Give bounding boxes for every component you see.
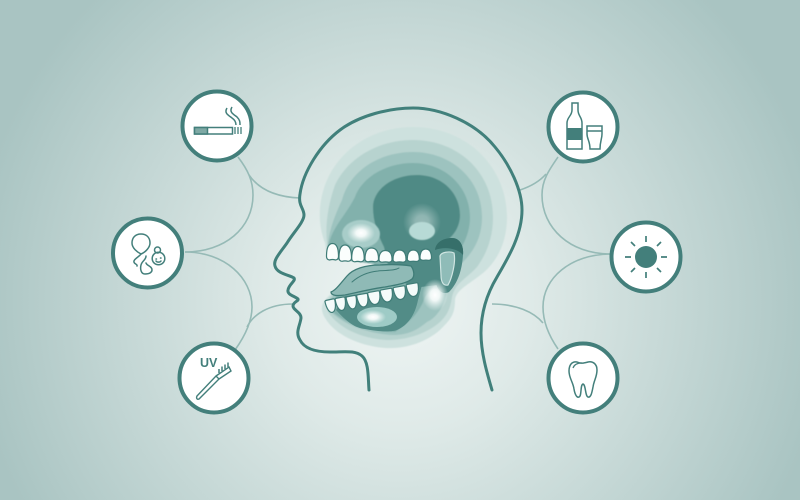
glow: sinus halo (403, 203, 441, 241)
icon: sun (612, 222, 680, 292)
lower jaw interior (336, 285, 422, 331)
icon: balloon and baby (113, 218, 182, 288)
head cross-section (275, 108, 522, 390)
upper teeth (326, 244, 432, 262)
icon: tooth (548, 344, 618, 412)
icon: cigarette (182, 92, 252, 160)
glow: cheek (347, 223, 375, 243)
head outline (275, 108, 522, 390)
joint dark (435, 238, 463, 293)
glow: cheek halo (342, 220, 380, 248)
icon: bottle and glass (548, 92, 618, 162)
lower teeth (325, 283, 420, 313)
uv label: UV (200, 356, 218, 370)
glow: sinus pad (409, 222, 435, 240)
connectors (185, 157, 610, 350)
icon: UV toothbrush (180, 344, 248, 412)
glow: lower jaw (360, 310, 386, 324)
lower gum pad (357, 307, 397, 327)
joint cartilage (440, 252, 455, 285)
tissue contour layers (320, 127, 507, 348)
glow: salivary gland (422, 279, 448, 311)
joint cap (435, 238, 463, 255)
soft tissue behind tongue (395, 258, 438, 288)
tongue (331, 265, 414, 296)
